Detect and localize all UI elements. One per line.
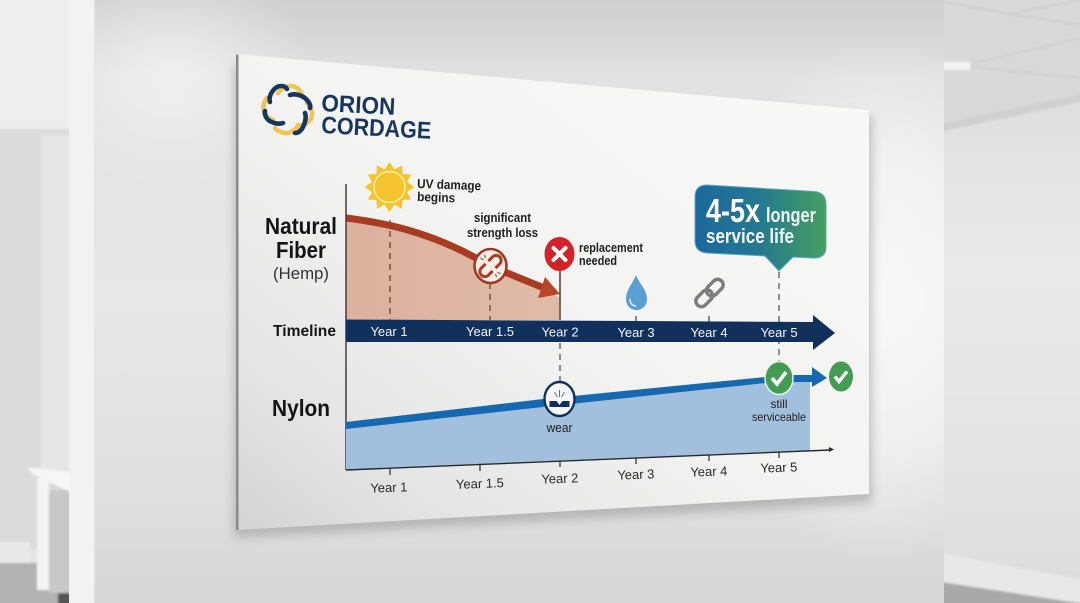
logo wordmark	[321, 90, 432, 145]
right room	[935, 0, 1080, 603]
bottom year labels: Year 4	[690, 463, 728, 480]
text: wear: wear	[546, 421, 572, 435]
label: Timeline: Timeline	[273, 323, 336, 340]
icon: replacement X	[544, 237, 574, 271]
bottom year labels	[370, 459, 798, 496]
text: replacement needed: replacement	[579, 241, 644, 255]
label: Natural Fiber (Hemp)	[265, 213, 337, 283]
text: UV damage begins	[417, 176, 481, 205]
row labels	[265, 213, 337, 421]
label: Natural Fiber (Hemp): Natural	[265, 213, 337, 239]
timeline year labels: Year 1.5	[466, 324, 514, 339]
bottom year labels: Year 5	[760, 459, 798, 476]
sign panel	[236, 54, 869, 530]
text: replacement needed	[579, 241, 644, 268]
text: UV damage begins: begins	[417, 189, 455, 205]
timeline year labels: Year 3	[617, 325, 655, 340]
marker ticks above timeline	[636, 316, 709, 322]
icon: sun	[364, 162, 414, 212]
timeline year labels: Year 2	[541, 324, 579, 340]
callout: 4-5x longer service life: service life	[706, 226, 794, 248]
text: still serviceable: still	[770, 397, 788, 411]
logo wordmark: ORION	[321, 90, 396, 121]
dashed line year 2 to wear	[559, 343, 561, 384]
logo: Orion Cordage	[263, 86, 432, 145]
timeline year labels: Year 1	[370, 324, 408, 339]
text: significant strength loss	[467, 210, 538, 240]
label: Natural Fiber (Hemp): Fiber	[276, 237, 326, 263]
icon: water drop	[626, 275, 647, 310]
column	[69, 0, 94, 603]
text: replacement needed: needed	[579, 254, 617, 268]
text: significant strength loss: strength loss	[467, 225, 538, 240]
main wall	[95, 0, 944, 603]
nylon arrow	[790, 367, 827, 387]
nylon trend line	[346, 377, 765, 429]
natural fiber chart	[346, 218, 560, 320]
bottom year labels: Year 1.5	[456, 475, 504, 492]
nylon chart	[346, 367, 827, 470]
logo wordmark: CORDAGE	[321, 112, 432, 145]
logo knot icon	[263, 86, 312, 133]
strength decline arrow	[346, 218, 560, 298]
label: Nylon: Nylon	[272, 395, 330, 421]
icon: check end	[829, 362, 853, 392]
icon: chain link	[694, 277, 725, 309]
bottom year labels: Year 2	[541, 470, 579, 487]
callout: 4-5x longer service life: longer	[766, 205, 816, 227]
icon: check year 5	[765, 362, 793, 394]
degradation area	[346, 218, 559, 320]
bottom year labels: Year 1	[370, 479, 408, 496]
text: still serviceable: serviceable	[752, 410, 806, 424]
callout: 4-5x longer service life	[695, 185, 826, 271]
dashed markers	[390, 220, 490, 320]
timeline year labels	[370, 324, 798, 340]
marker line at year 2	[559, 262, 561, 320]
label: Natural Fiber (Hemp): (Hemp)	[273, 264, 329, 283]
callout: 4-5x longer service life: 4-5x	[706, 192, 761, 229]
timeline year labels: Year 5	[760, 325, 798, 340]
sign shadow	[234, 66, 872, 538]
text: significant strength loss: significant	[474, 210, 532, 225]
timeline arrow	[346, 315, 835, 350]
icon: wear	[544, 382, 574, 416]
vertical axis	[345, 184, 347, 470]
text: UV damage begins: UV damage	[417, 176, 481, 193]
nylon area	[346, 378, 810, 470]
left room	[0, 0, 75, 603]
timeline year labels: Year 4	[690, 325, 728, 340]
bottom year labels: Year 3	[617, 466, 655, 483]
bottom axis	[346, 447, 834, 475]
text: still serviceable	[752, 397, 806, 424]
dashed line from callout	[778, 272, 780, 362]
icon: broken link	[474, 249, 506, 283]
